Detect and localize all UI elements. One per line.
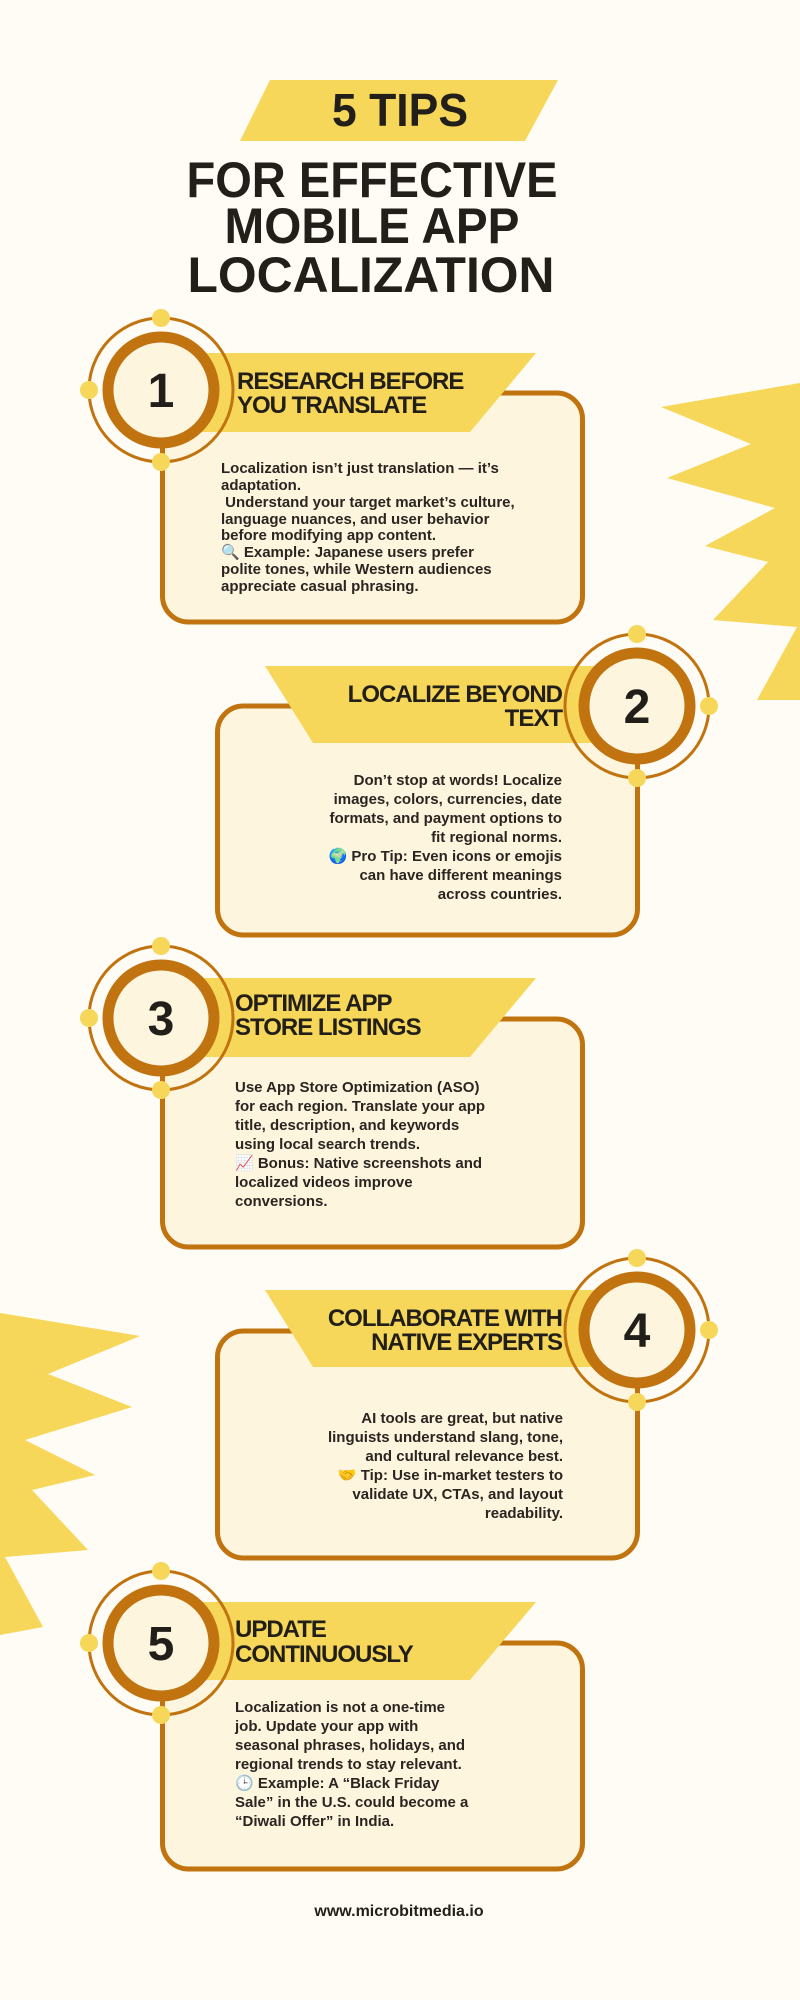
body text: 🕒 Example: A “Black Friday — [235, 1774, 440, 1792]
body text: language nuances, and user behavior — [221, 511, 490, 528]
title: FOR EFFECTIVE — [186, 152, 558, 208]
body text: Localization isn’t just translation — it’s — [221, 460, 499, 477]
body text: AI tools are great, but native — [361, 1410, 563, 1427]
body text: Understand your target market’s culture, — [221, 494, 515, 511]
header banner — [170, 353, 536, 432]
heading: YOU TRANSLATE — [237, 392, 427, 419]
body text: appreciate casual phrasing. — [221, 578, 419, 595]
body text: 🌍 Pro Tip: Even icons or emojis — [329, 847, 562, 865]
body text: using local search trends. — [235, 1136, 420, 1153]
heading: NATIVE EXPERTS — [371, 1329, 563, 1356]
panel: tip 4 — [218, 1249, 718, 1558]
number badge: 5 — [148, 1618, 174, 1671]
heading: TEXT — [505, 705, 563, 732]
body text: regional trends to stay relevant. — [235, 1756, 462, 1773]
body text: validate UX, CTAs, and layout — [352, 1486, 563, 1503]
body text: 📈 Bonus: Native screenshots and — [235, 1154, 482, 1172]
body text: fit regional norms. — [431, 829, 562, 846]
box — [218, 706, 638, 935]
body text: can have different meanings — [359, 867, 562, 884]
heading: CONTINUOUSLY — [235, 1641, 414, 1668]
number badge: 2 — [624, 681, 650, 734]
number badge — [565, 625, 718, 787]
body text: job. Update your app with — [234, 1718, 418, 1735]
box — [162, 1643, 582, 1869]
number badge: 3 — [148, 993, 174, 1046]
body text: title, description, and keywords — [235, 1117, 459, 1134]
panel: tip 3 — [80, 937, 582, 1247]
header banner — [265, 666, 630, 743]
body text: Don’t stop at words! Localize — [354, 772, 562, 789]
footer url: www.microbitmedia.io — [313, 1903, 484, 1920]
body text: Sale” in the U.S. could become a — [235, 1794, 469, 1811]
box — [218, 1331, 638, 1558]
heading: LOCALIZE BEYOND — [348, 681, 563, 708]
body text: Localization is not a one-time — [235, 1699, 445, 1716]
heading: UPDATE — [235, 1616, 327, 1643]
body text: for each region. Translate your app — [235, 1098, 485, 1115]
number badge: 1 — [148, 365, 174, 418]
starburst left — [0, 1313, 140, 1635]
panel: tip 2 — [218, 625, 718, 935]
title: MOBILE APP — [224, 198, 520, 254]
number badge — [80, 309, 233, 471]
header banner — [170, 1602, 536, 1680]
body text: readability. — [485, 1505, 563, 1522]
box — [162, 1019, 582, 1247]
title: LOCALIZATION — [188, 247, 554, 303]
body text: seasonal phrases, holidays, and — [235, 1737, 465, 1754]
title banner: 5 TIPS: 5 TIPS — [332, 84, 468, 136]
body text: “Diwali Offer” in India. — [235, 1813, 394, 1830]
heading: RESEARCH BEFORE — [237, 368, 464, 395]
starburst right — [661, 383, 800, 700]
heading: OPTIMIZE APP — [235, 990, 392, 1017]
body text: localized videos improve — [235, 1174, 413, 1191]
number badge — [565, 1249, 718, 1411]
body text: and cultural relevance best. — [365, 1448, 563, 1465]
header banner — [265, 1290, 630, 1367]
number badge — [80, 1562, 233, 1724]
body text: across countries. — [438, 886, 562, 903]
body text: conversions. — [235, 1193, 328, 1210]
body text: before modifying app content. — [221, 527, 436, 544]
heading: STORE LISTINGS — [235, 1014, 422, 1041]
body text: linguists understand slang, tone, — [328, 1429, 563, 1446]
body text: 🤝 Tip: Use in-market testers to — [338, 1467, 563, 1484]
body text: polite tones, while Western audiences — [221, 561, 492, 578]
number badge — [80, 937, 233, 1099]
panel: tip 1 — [80, 309, 582, 622]
body text: Use App Store Optimization (ASO) — [235, 1079, 479, 1096]
body text: 🔍 Example: Japanese users prefer — [221, 542, 474, 561]
body text: adaptation. — [221, 477, 301, 494]
title banner: 5 TIPS — [240, 80, 558, 141]
header banner — [170, 978, 536, 1057]
body text: images, colors, currencies, date — [334, 791, 562, 808]
title — [186, 152, 558, 303]
body text: formats, and payment options to — [329, 810, 562, 827]
box — [162, 393, 582, 622]
panel: tip 5 — [80, 1562, 582, 1869]
heading: COLLABORATE WITH — [328, 1305, 562, 1332]
number badge: 4 — [624, 1305, 651, 1358]
